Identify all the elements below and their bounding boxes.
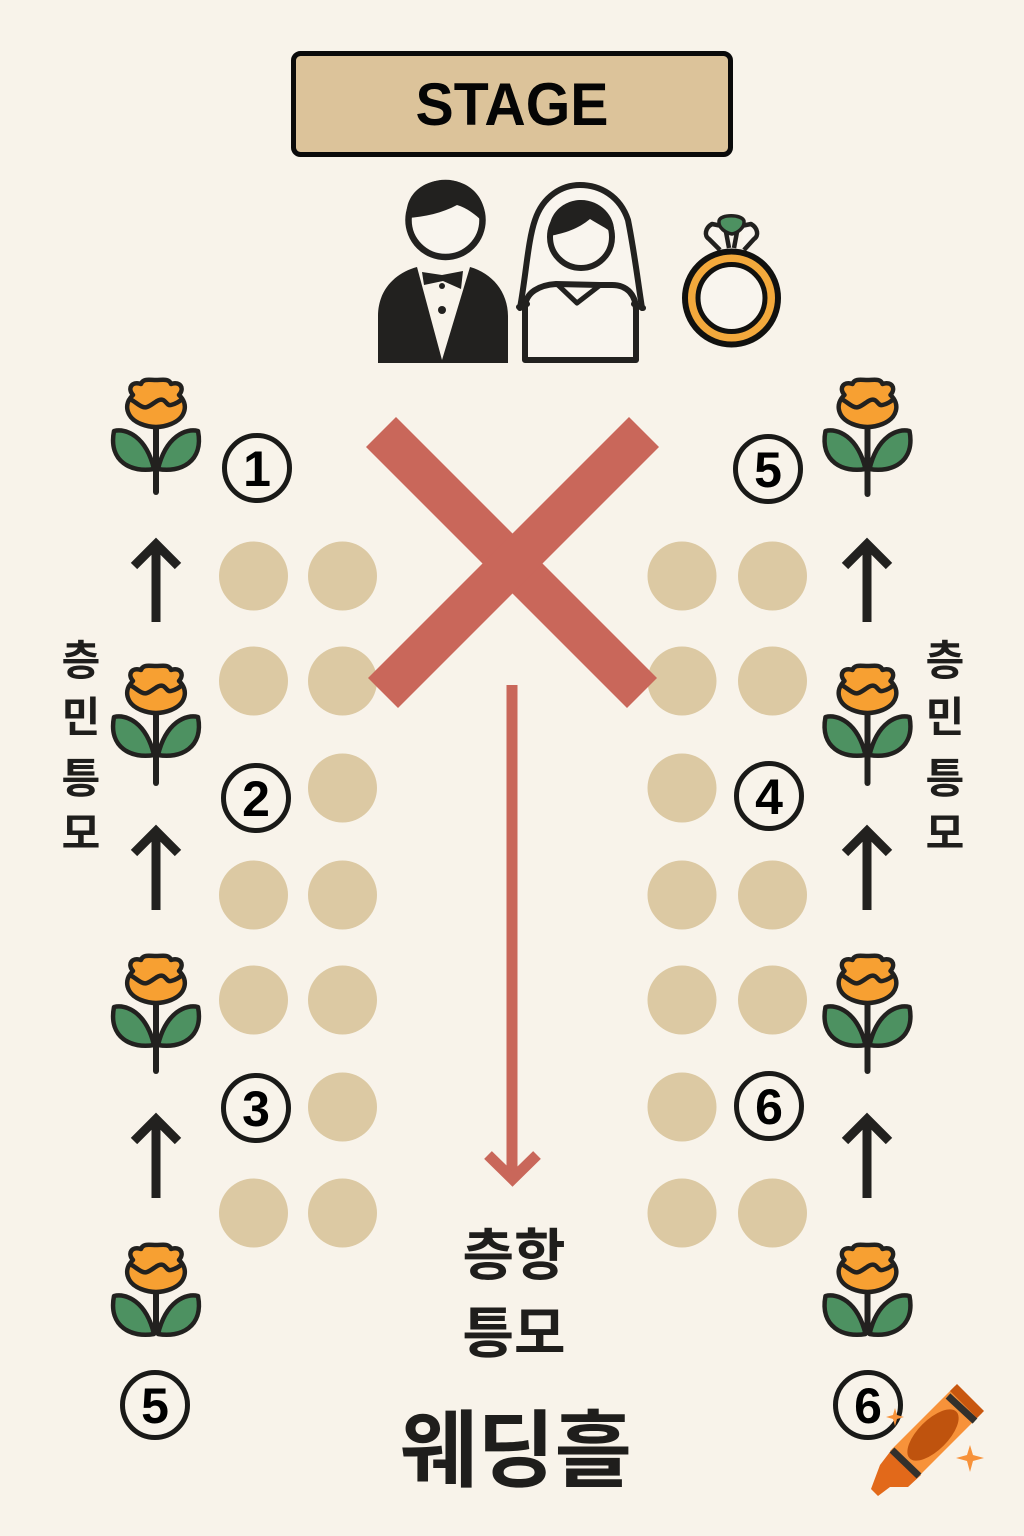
left vertical label: 민 xyxy=(62,694,100,741)
left vertical label: 층 xyxy=(62,637,100,684)
right vertical label: 층 xyxy=(926,637,964,684)
number badge 6 bottom right xyxy=(836,1372,900,1438)
right vertical label xyxy=(926,637,964,857)
number badge 5 bottom left: 5 xyxy=(141,1378,169,1434)
number badge 6 bottom right: 6 xyxy=(854,1378,882,1434)
main entrance label xyxy=(462,1224,566,1365)
left vertical label: 틍 xyxy=(62,755,100,802)
number badge 2: 2 xyxy=(242,771,270,827)
icon: bride xyxy=(519,185,643,360)
main entrance label: 층항 xyxy=(462,1224,566,1287)
stage sign xyxy=(294,54,730,154)
number badge 5 bottom left xyxy=(122,1372,188,1438)
number badge 3: 3 xyxy=(242,1081,270,1137)
number badge 1 xyxy=(224,436,290,500)
number badge 4: 4 xyxy=(755,769,783,825)
right flowers xyxy=(825,380,910,1335)
number badge 4 xyxy=(736,764,802,828)
number badge 5 right xyxy=(736,436,800,502)
left flowers xyxy=(113,380,199,1335)
right up arrows xyxy=(845,544,889,1198)
icon: crayon xyxy=(871,1384,984,1496)
number badge 1: 1 xyxy=(243,441,271,497)
number badge 3 xyxy=(224,1076,288,1140)
red X mark xyxy=(366,417,659,708)
right vertical label: 틍 xyxy=(926,755,964,802)
left vertical label: 모 xyxy=(62,810,100,857)
number badge 2 xyxy=(224,766,288,830)
stage sign: STAGE xyxy=(416,71,608,138)
number badge 5 right: 5 xyxy=(754,442,782,498)
icon: groom xyxy=(378,180,508,363)
right seating dots xyxy=(648,542,807,1248)
left vertical label xyxy=(62,637,100,857)
right vertical label: 민 xyxy=(926,694,964,741)
number badge 6 right: 6 xyxy=(755,1079,783,1135)
number badge 6 right xyxy=(736,1074,802,1138)
red aisle arrow xyxy=(488,685,537,1179)
main entrance label: 틍모 xyxy=(462,1302,566,1365)
venue title: 웨딩흘 xyxy=(400,1404,632,1498)
icon: ring xyxy=(685,216,778,344)
left up arrows xyxy=(134,544,178,1198)
right vertical label: 모 xyxy=(926,810,964,857)
left seating dots xyxy=(219,542,377,1248)
